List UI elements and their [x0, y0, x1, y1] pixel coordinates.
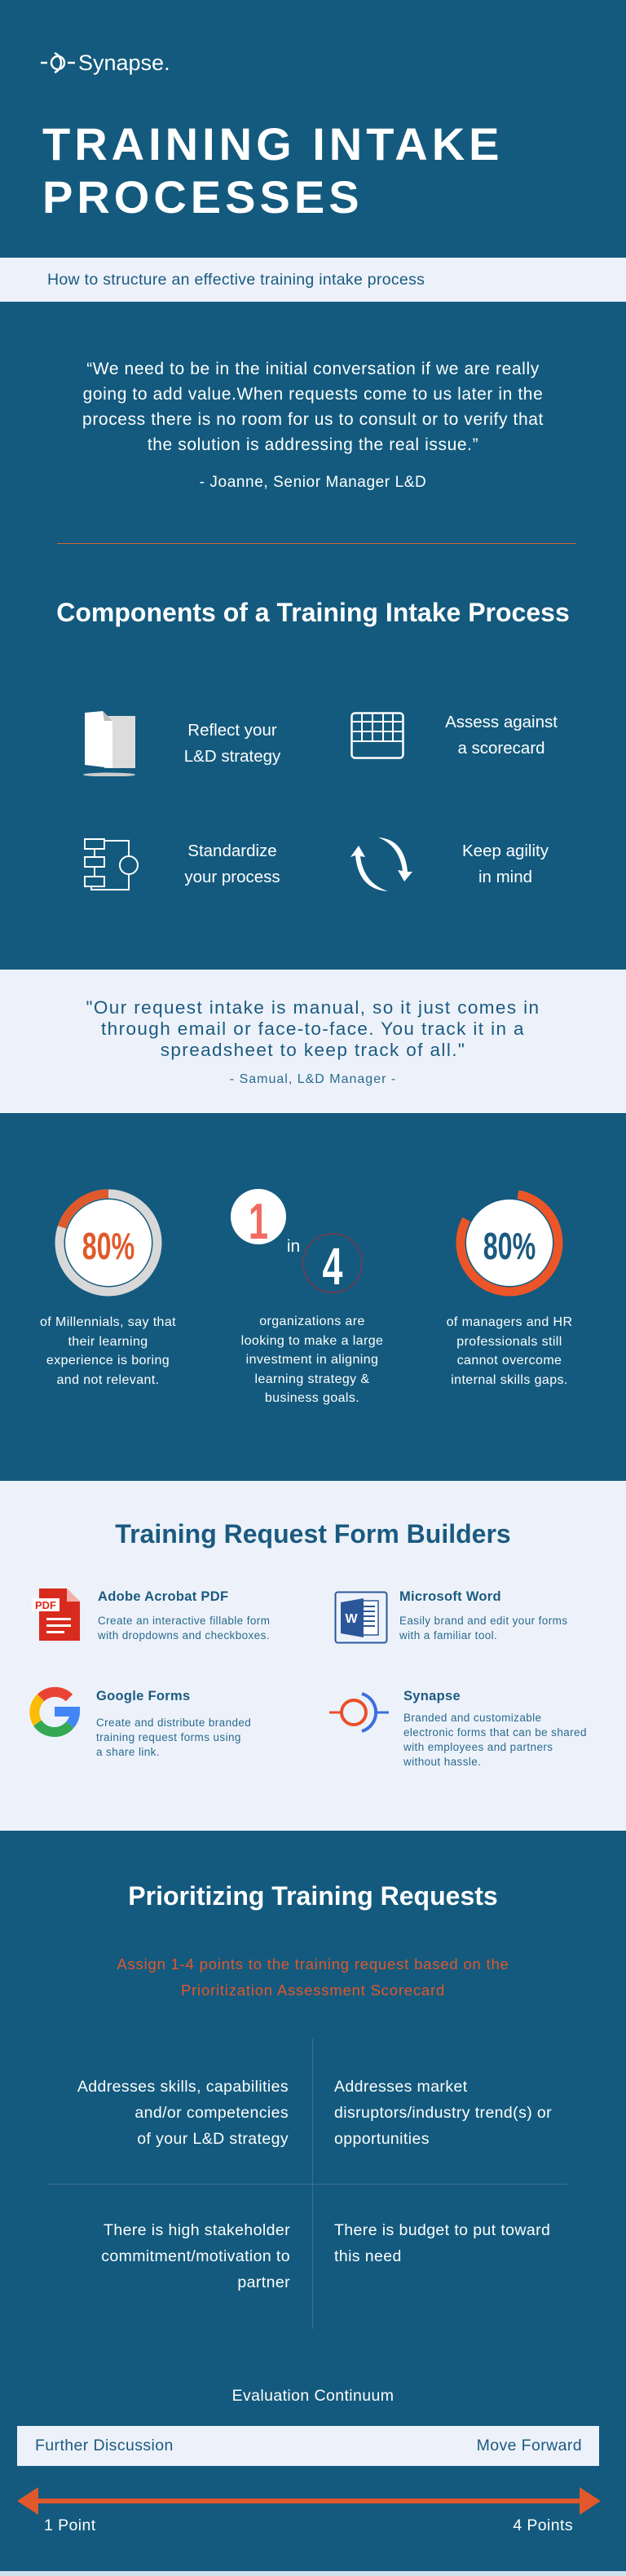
quote: Joanne: “We need to be in the initial conversation if we are really — [86, 360, 540, 378]
icon: flowchart — [84, 838, 139, 890]
icon: document — [83, 711, 135, 776]
builder: Adobe — [32, 1588, 270, 1641]
builder: Word: Easily brand and edit your forms — [399, 1615, 567, 1627]
continuum box: Move Forward — [477, 2437, 582, 2454]
orange instruction: Prioritization Assessment Scorecard — [181, 1982, 445, 1999]
icon: table — [350, 712, 404, 759]
stat: 80% managers: 80% — [483, 1226, 536, 1267]
component: scorecard: Assess against — [445, 713, 558, 731]
stat: 1 in 4 — [231, 1189, 383, 1405]
icon: cycle arrows — [350, 837, 412, 891]
orange instruction — [117, 1955, 509, 1999]
stat: 1 in 4: investment in aligning — [246, 1353, 378, 1367]
stat: 80% millennials: of Millennials, say that — [40, 1315, 176, 1329]
stat: 1 in 4: 1 — [249, 1195, 268, 1250]
title: TRAINING INTAKE — [42, 118, 504, 170]
quote: Joanne: - Joanne, Senior Manager L&D — [200, 474, 426, 491]
builder: Word: with a familiar tool. — [399, 1629, 497, 1641]
criterion: skills: of your L&D strategy — [137, 2130, 289, 2148]
criterion: stakeholder: partner — [237, 2273, 290, 2291]
heading: prioritizing: Prioritizing Training Requests — [128, 1881, 498, 1911]
builder: Google: Google Forms — [96, 1689, 190, 1703]
logo: Synapse. — [78, 51, 170, 75]
builder: Adobe: Adobe Acrobat PDF — [98, 1589, 228, 1604]
evaluation continuum label: Evaluation Continuum — [232, 2387, 394, 2405]
continuum box: Further Discussion — [35, 2437, 174, 2454]
icon: word: W — [345, 1612, 358, 1626]
arrow: continuum — [17, 2487, 601, 2515]
label: 1 point: 1 Point — [44, 2516, 96, 2534]
quote band: Samual: "Our request intake is manual, so it just comes in — [86, 997, 540, 1018]
stat: 80% millennials: their learning — [68, 1334, 148, 1349]
stat: 1 in 4: organizations are — [259, 1315, 365, 1328]
criterion: budget: this need — [334, 2247, 402, 2265]
stat: 80% millennials: 80% — [82, 1226, 134, 1267]
stat: 1 in 4: 4 — [323, 1237, 343, 1296]
stat: 80% managers — [447, 1191, 572, 1386]
icon: pdf: PDF — [35, 1599, 56, 1611]
header section — [0, 0, 626, 970]
icon: pdf — [32, 1588, 80, 1641]
component: reflect strategy: Reflect your — [187, 721, 277, 740]
quote: Joanne: going to add value.When requests come to us later in the — [83, 385, 543, 404]
criterion: skills: and/or competencies — [134, 2104, 289, 2122]
quote band: Samual: through email or face-to-face. You track it in a — [101, 1018, 525, 1039]
builder: Word: Microsoft Word — [399, 1589, 501, 1604]
component: scorecard: a scorecard — [457, 739, 545, 758]
criterion: market — [334, 2078, 552, 2148]
title: PROCESSES — [42, 171, 364, 223]
quote: Joanne: the solution is addressing the real issue.” — [148, 435, 478, 454]
criterion: budget: There is budget to put toward — [334, 2221, 550, 2239]
stat: 80% managers: internal skills gaps. — [451, 1373, 568, 1386]
builder: Synapse: Synapse — [403, 1689, 461, 1703]
builder: Synapse: without hassle. — [403, 1756, 481, 1768]
icon: google G — [29, 1686, 80, 1737]
component: agility: in mind — [478, 868, 532, 886]
criterion: stakeholder: commitment/motivation to — [101, 2247, 290, 2265]
quote: Joanne: process there is no room for us to consult or to verify that — [82, 410, 544, 429]
icon: synapse logo — [329, 1692, 389, 1733]
component: scorecard — [350, 712, 558, 759]
stat: 1 in 4: learning strategy & — [254, 1372, 370, 1386]
stat: 1 in 4: business goals. — [265, 1391, 359, 1405]
icon: word — [334, 1592, 388, 1644]
stat: 1 in 4: looking to make a large — [241, 1334, 383, 1347]
stat: 80% managers: of managers and HR — [447, 1315, 572, 1329]
component: agility: Keep agility — [462, 842, 549, 860]
stat: 80% managers: professionals still — [456, 1334, 562, 1349]
criterion: market: opportunities — [334, 2130, 430, 2148]
builder: Synapse — [329, 1689, 587, 1768]
criterion: skills: Addresses skills, capabilities — [77, 2078, 289, 2096]
criterion: stakeholder: There is high stakeholder — [104, 2221, 290, 2239]
builder: Adobe: Create an interactive fillable form — [98, 1615, 270, 1627]
form builders section — [0, 1481, 626, 1831]
heading: form builders: Training Request Form Builders — [115, 1519, 511, 1549]
builder: Google: training request forms using — [96, 1731, 241, 1743]
quote band: Samual: - Samual, L&D Manager - — [230, 1072, 396, 1086]
builder: Google: a share link. — [96, 1746, 160, 1758]
criterion: market: Addresses market — [334, 2078, 468, 2096]
builder: Google: Create and distribute branded — [96, 1717, 251, 1729]
builder: Synapse: with employees and partners — [403, 1741, 553, 1753]
stat: 80% millennials — [40, 1189, 176, 1386]
criterion: skills — [77, 2078, 289, 2148]
builder: Google — [29, 1686, 251, 1758]
heading: components: Components of a Training Intake Process — [56, 598, 570, 627]
subtitle band — [0, 258, 626, 302]
criterion: budget — [334, 2221, 550, 2265]
quote: Joanne — [82, 360, 544, 491]
quote band: Samual — [0, 970, 626, 1113]
title — [42, 118, 504, 223]
stat: 80% managers: cannot overcome — [457, 1354, 562, 1368]
scorecard grid — [47, 2039, 567, 2329]
subtitle band: How to structure an effective training intake process — [47, 271, 425, 289]
component: standardize: Standardize — [187, 842, 277, 860]
builder: Synapse: Branded and customizable — [403, 1712, 541, 1724]
component: reflect strategy: L&D strategy — [184, 747, 280, 766]
prioritizing section — [0, 1881, 626, 2576]
builder: Word — [334, 1589, 567, 1644]
builder: Synapse: electronic forms that can be shared — [403, 1726, 587, 1739]
quote band: Samual: spreadsheet to keep track of all." — [161, 1040, 465, 1060]
continuum box — [17, 2426, 599, 2466]
component: agility — [350, 837, 549, 891]
component: standardize — [84, 838, 280, 890]
criterion: stakeholder — [101, 2221, 290, 2291]
stat: 1 in 4: in — [287, 1237, 300, 1256]
orange instruction: Assign 1-4 points to the training request based on the — [117, 1955, 509, 1973]
component: reflect strategy — [83, 711, 280, 776]
stats section — [40, 1189, 572, 1405]
stat: 80% millennials: and not relevant. — [57, 1373, 160, 1386]
stat: 80% millennials: experience is boring — [46, 1354, 170, 1368]
builder: Adobe: with dropdowns and checkboxes. — [98, 1629, 270, 1641]
component: standardize: your process — [184, 868, 280, 886]
label: 4 points: 4 Points — [513, 2516, 573, 2534]
criterion: market: disruptors/industry trend(s) or — [334, 2104, 552, 2122]
